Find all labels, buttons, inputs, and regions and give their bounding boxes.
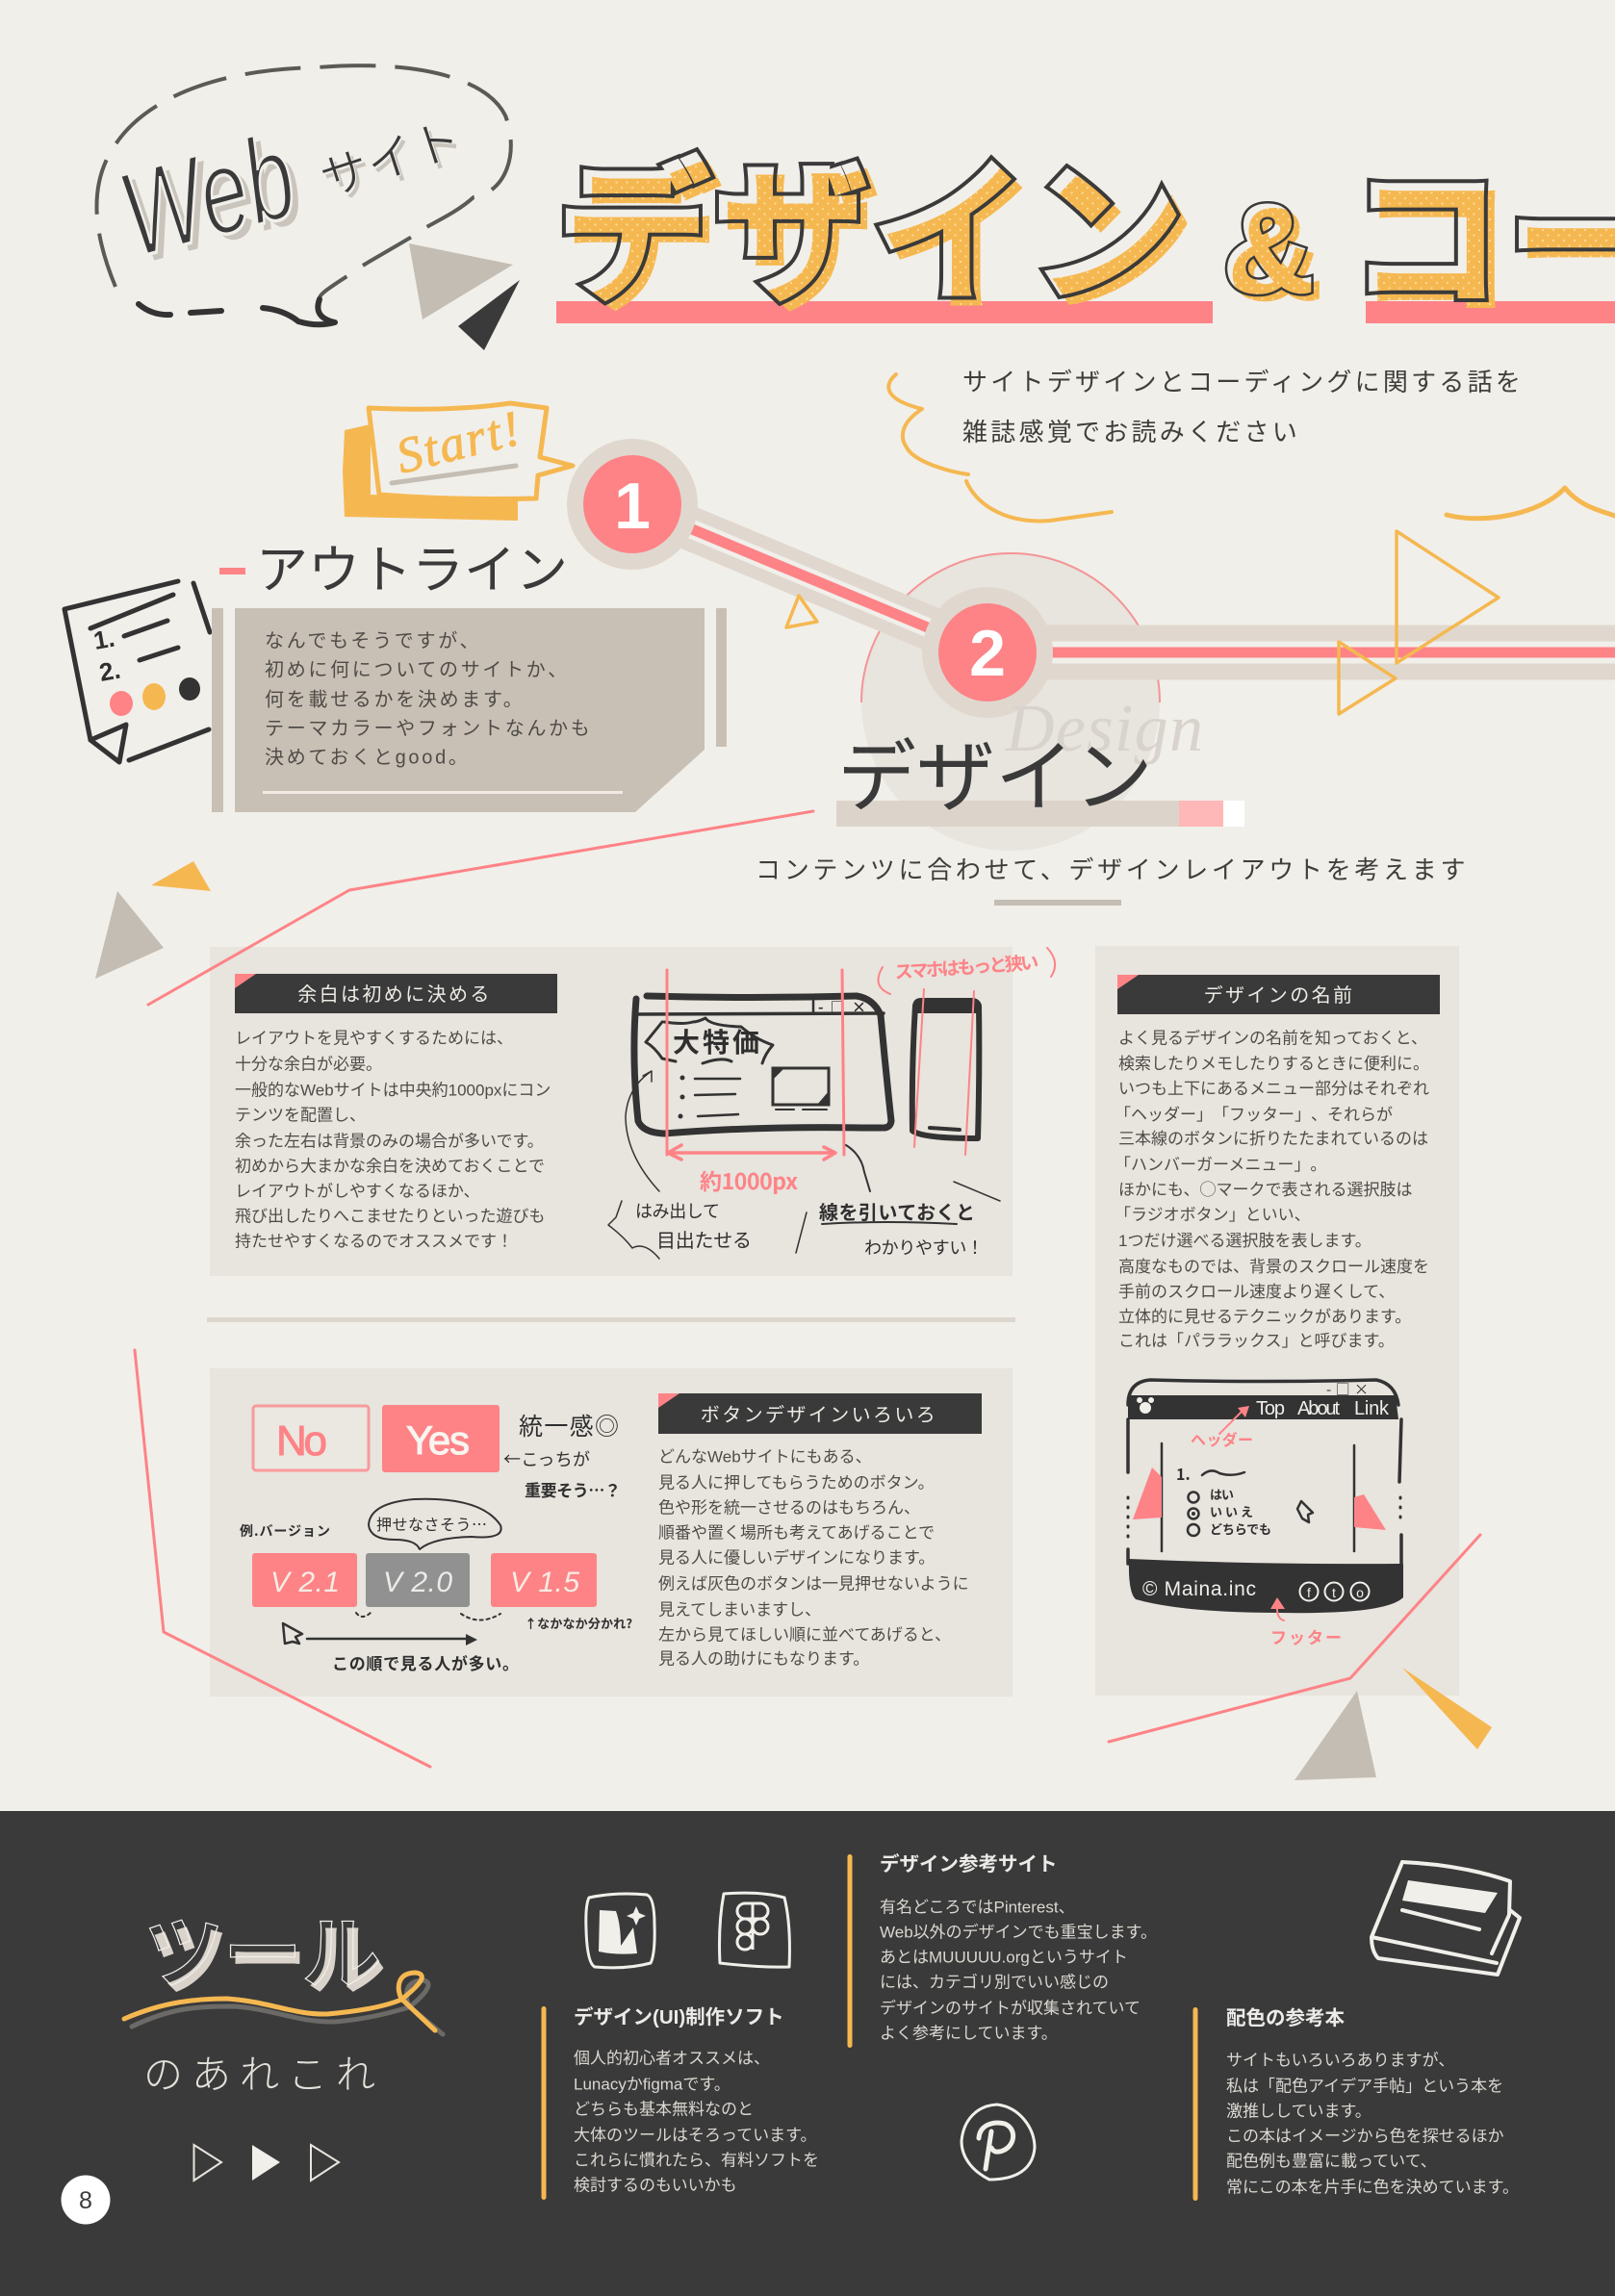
handwritten notes: わかりやすい！ [864, 1235, 984, 1260]
subtitle lines: 雑誌感覚でお読みください [962, 418, 1300, 446]
names body text: いつも上下にあるメニュー部分はそれぞれ [1118, 1080, 1429, 1098]
reference sites text: デザインのサイトが収集されていて [880, 1998, 1141, 2017]
button body text [658, 1447, 969, 1669]
button body text: 見る人に押してもらうためのボタン。 [658, 1474, 935, 1492]
footer pointer: フッター [1270, 1624, 1342, 1648]
names body text: 「ラジオボタン」といい、 [1115, 1206, 1311, 1224]
handwritten notes on no and yes: 統一感◎ [519, 1408, 619, 1442]
notepad icon [64, 581, 210, 762]
version reading order notes: ↑なかなか分かれ? [525, 1614, 632, 1632]
page number: 8 [79, 2187, 92, 2214]
outline panel text: テーマカラーやフォントなんかも [265, 718, 593, 739]
names body text: 高度なものでは、背景のスクロール速度を [1118, 1258, 1429, 1276]
footer pointer [1270, 1597, 1342, 1648]
header pointer: ヘッダー [1191, 1427, 1253, 1450]
button body text: 例えば灰色のボタンは一見押せないように [658, 1574, 969, 1594]
title fill layer [567, 119, 1615, 345]
website anatomy sketch [1128, 1379, 1403, 1648]
block: color reference book: 配色の参考本 [1226, 2007, 1345, 2029]
header labels [1137, 1397, 1390, 1419]
pink measurement guides: スマホはもっと狭い [894, 949, 1039, 984]
no button: No [276, 1417, 327, 1465]
panel: button designs [210, 1368, 1013, 1696]
tools title: ツール [144, 1890, 381, 2004]
step 1 marker [567, 439, 698, 570]
handwritten notes on no and yes: 重要そう…？ [525, 1477, 621, 1501]
title outline layer [562, 146, 1615, 306]
reference sites text: 有名どころではPinterest、 [880, 1898, 1075, 1917]
start sign: Start! [391, 401, 526, 485]
margins header: 余白は初めに決める [297, 983, 492, 1006]
margins body text: 飛び出したりへこませたりといった遊びも [235, 1207, 545, 1226]
button body text: 見る人の助けにもなります。 [658, 1649, 869, 1669]
outline panel text: 何を載せるかを決めます。 [265, 689, 525, 710]
header pointer [1191, 1406, 1253, 1450]
UI software text: Lunacyかfigmaです。 [574, 2075, 731, 2094]
notepad icon: 1. [91, 624, 116, 655]
title fill layer: & [1230, 184, 1320, 324]
margins body text [235, 1030, 551, 1251]
margins body text: 持たせやすくなるのでオススメです！ [235, 1232, 513, 1251]
version example label and bubble [240, 1499, 501, 1549]
start sign [343, 401, 573, 521]
sketched form: はい [1210, 1485, 1234, 1503]
version reading order notes: この順で見る人が多い。 [332, 1650, 519, 1674]
burst label [646, 1018, 773, 1063]
large pale circle behind step 2 [861, 552, 1160, 851]
names body text: 手前のスクロール速度より遅くして、 [1118, 1283, 1395, 1301]
color reference text: この本はイメージから色を探せるほか [1226, 2127, 1504, 2146]
margins body text: テンツを配置し、 [235, 1107, 366, 1124]
color reference text: 激推ししています。 [1226, 2102, 1371, 2121]
page number [62, 2175, 110, 2225]
version reading order notes [283, 1613, 632, 1674]
outline panel text: 決めておくとgood。 [265, 747, 471, 768]
tools title [124, 1890, 443, 2034]
main title: design and coding [556, 146, 1615, 323]
version buttons: V 2.1 [270, 1567, 340, 1598]
button body text: どんなWebサイトにもある、 [658, 1447, 872, 1467]
browser sketch [608, 948, 1055, 1260]
color reference text: 私は「配色アイデア手帖」という本を [1226, 2077, 1503, 2096]
outline panel text: なんでもそうですが、 [265, 629, 481, 652]
title badge: Web site speech bubble: サイト [318, 116, 472, 212]
route line connecting steps [632, 504, 1615, 652]
version buttons: V 2.0 [383, 1567, 452, 1598]
names body text: 三本線のボタンに折りたたまれているのは [1118, 1130, 1428, 1148]
margins body text: レイアウトを見やすくするためには、 [235, 1030, 513, 1047]
footer labels [1142, 1578, 1369, 1601]
title badge: Web site speech bubble: Web [107, 109, 309, 284]
UI software text: 検討するのもいいかも [574, 2177, 737, 2194]
subtitle lines: サイトデザインとコーディングに関する話を [962, 368, 1524, 396]
reference sites text [880, 1898, 1157, 2042]
margins body text: 初めから大まかな余白を決めておくことで [235, 1157, 545, 1176]
handwritten notes on no and yes: ←こっちが [503, 1446, 590, 1471]
outline panel text: 初めに何についてのサイトか、 [265, 658, 570, 681]
play triangles [194, 2145, 339, 2181]
icon: lunacy [586, 1894, 654, 1968]
title badge: Web site speech bubble [96, 65, 511, 324]
phone sketch [912, 1001, 979, 1138]
margins body text: 十分な余白が必要。 [235, 1055, 382, 1074]
website anatomy sketch: -□× [1326, 1379, 1369, 1399]
names body text: これは「パララックス」と呼びます。 [1118, 1332, 1395, 1350]
title badge: Web site speech bubble: Web [114, 115, 316, 290]
tools title: ツール [149, 1897, 386, 2011]
step 2 marker [922, 587, 1053, 718]
names body text: 1つだけ選べる選択肢を表します。 [1118, 1232, 1371, 1250]
version example label and bubble: 押せなさそう… [376, 1512, 487, 1535]
handwritten notes: はみ出して [635, 1198, 720, 1223]
filled triangles left [95, 861, 211, 979]
step 1 marker: 1 [614, 470, 651, 543]
decorative triangles beside title badge [409, 243, 520, 350]
footer labels: o [1356, 1585, 1364, 1600]
tools subtitle: のあれこれ [143, 2053, 384, 2097]
margins body text: 余った左右は背景のみの場合が多いです。 [235, 1132, 544, 1151]
names body text: よく見るデザインの名前を知っておくと、 [1118, 1028, 1427, 1047]
title fill layer: デザイン [567, 119, 1198, 340]
outline panel [212, 608, 727, 812]
button body text: 順番や置く場所も考えてあげることで [658, 1524, 935, 1542]
yes button [382, 1405, 500, 1472]
header labels: Link [1354, 1398, 1390, 1419]
button body text: 見る人に優しいデザインになります。 [658, 1547, 935, 1567]
reference sites text: よく参考にしています。 [880, 2025, 1058, 2042]
reference sites text: Web以外のデザインでも重宝します。 [880, 1923, 1157, 1942]
block: reference sites [847, 1852, 1157, 2048]
button body text: 色や形を統一させるのはもちろん、 [658, 1499, 920, 1517]
small divider bar [994, 900, 1121, 906]
sketched form [1128, 1462, 1400, 1540]
icon: figma [720, 1893, 789, 1967]
subtitle lines [962, 368, 1524, 446]
UI software text [574, 2050, 819, 2194]
page content sketch [678, 1068, 829, 1118]
browser sketch: -□× [818, 997, 866, 1017]
block: reference sites: デザイン参考サイト [880, 1852, 1057, 1875]
reference sites text: には、カテゴリ別でいい感じの [880, 1973, 1109, 1992]
block: UI software [541, 2005, 819, 2200]
names body text: 検索したりメモしたりするときに便利に。 [1118, 1055, 1429, 1073]
design subheading: コンテンツに合わせて、デザインレイアウトを考えます [756, 855, 1469, 884]
margins body text: レイアウトがしやすくなるほか、 [235, 1182, 479, 1201]
sketched form: いいえ [1210, 1502, 1253, 1520]
names body text: 「ハンバーガーメニュー」。 [1115, 1156, 1326, 1174]
pink measurement guides: 約1000px [700, 1163, 798, 1196]
pink guide line upper left [148, 811, 813, 1005]
icon: pinterest [961, 2105, 1035, 2180]
no button [253, 1406, 369, 1470]
button header: ボタンデザインいろいろ [701, 1404, 937, 1426]
names body text [1115, 1028, 1429, 1350]
panel: margins [210, 947, 1055, 1276]
outline panel text [265, 629, 593, 768]
design watermark: Design [1005, 692, 1203, 766]
title underlines [556, 301, 1615, 323]
triangles lower right [1295, 1668, 1492, 1780]
panel: design names [1095, 946, 1459, 1696]
design heading: デザイン [837, 734, 1153, 822]
icon: color book [1371, 1862, 1520, 1975]
handwritten notes on no and yes [503, 1408, 621, 1501]
pink mountains [1133, 1467, 1386, 1530]
names body text: 「ヘッダー」「フッター」、それらが [1115, 1106, 1393, 1124]
block: UI software: デザイン(UI)制作ソフト [574, 2005, 784, 2028]
UI software text: どちらも基本無料なのと [574, 2100, 754, 2119]
outline section heading: アウトライン [256, 542, 568, 600]
handwritten notes: 目出たせる [656, 1225, 752, 1253]
footer labels: © Maina.inc [1142, 1578, 1256, 1600]
handwritten notes: 線を引いておくと [819, 1197, 975, 1225]
outlined yellow triangles [786, 531, 1499, 714]
UI software text: 個人的初心者オススメは、 [574, 2050, 770, 2067]
color reference text: 配色例も豊富に載っていて、 [1226, 2152, 1437, 2171]
footer labels: f [1307, 1585, 1311, 1600]
divider between panels [207, 1317, 1015, 1322]
names header: デザインの名前 [1204, 984, 1354, 1007]
color reference text: 常にこの本を片手に色を決めています。 [1226, 2179, 1519, 2196]
handwritten notes [608, 1071, 1000, 1260]
design heading bar [836, 801, 1244, 827]
margins header [235, 974, 557, 1013]
names body text: 立体的に見せるテクニックがあります。 [1118, 1308, 1411, 1326]
title badge: Web site speech bubble: サイト [314, 112, 468, 207]
footer labels: t [1332, 1585, 1336, 1600]
burst label: 大特価 [673, 1022, 759, 1060]
sketched form: どちらでも [1210, 1519, 1271, 1538]
notepad icon: 2. [97, 655, 122, 687]
block: color reference book [1193, 2007, 1519, 2201]
header labels: Top [1256, 1398, 1285, 1419]
step 2 marker: 2 [969, 617, 1006, 690]
UI software text: これらに慣れたら、有料ソフトを [574, 2152, 819, 2169]
button body text: 左から見てほしい順に並べてあげると、 [658, 1626, 951, 1644]
pink guide line lower left [135, 1350, 430, 1767]
button header [658, 1393, 982, 1434]
reference sites text: あとはMUUUUU.orgというサイト [880, 1948, 1128, 1967]
version example label and bubble: 例.バージョン [240, 1521, 330, 1541]
version buttons: V 1.5 [510, 1567, 579, 1598]
sketched form: 1. [1176, 1462, 1191, 1485]
margins body text: 一般的なWebサイトは中央約1000pxにコン [235, 1082, 551, 1099]
dark footer band [0, 1811, 1615, 2296]
names body text: ほかにも、◯マークで表される選択肢は [1118, 1181, 1413, 1199]
UI software text: 大体のツールはそろっています。 [574, 2127, 816, 2144]
pink guide line lower right [1109, 1535, 1480, 1742]
underline swoosh [124, 1973, 443, 2034]
button body text: 見えてしまいますし、 [658, 1601, 821, 1619]
header labels: About [1297, 1398, 1340, 1419]
yellow curly scribbles [888, 374, 1615, 521]
color reference text: サイトもいろいろありますが、 [1226, 2052, 1454, 2069]
version buttons [252, 1553, 597, 1607]
color reference text [1226, 2052, 1519, 2196]
names header [1117, 975, 1440, 1014]
yes button: Yes [406, 1417, 470, 1463]
pink measurement guides [667, 948, 1055, 1196]
